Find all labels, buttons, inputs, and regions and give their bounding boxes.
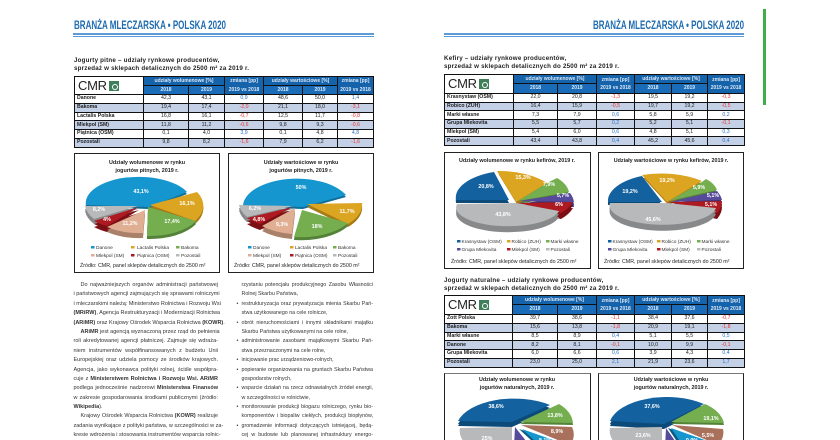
table: drinking yogurts: 9,3: [316, 122, 324, 128]
pie chart: 9,3%: [276, 222, 288, 228]
table: kefirs: 0,2: [612, 120, 619, 126]
pie chart: 18%: [312, 224, 323, 230]
table: drinking yogurts: 12,5: [278, 113, 288, 119]
text block: left body column: Do najważniejszych organów administracji państwowej: [80, 282, 218, 288]
table: natural yogurts: Zott Polska: [447, 315, 475, 321]
table: kefirs: Pozostali: [447, 138, 470, 144]
table: drinking yogurts: -0,8: [351, 113, 360, 119]
table: drinking yogurts: 19,4: [161, 104, 171, 110]
table: kefirs: [444, 74, 745, 146]
pie chart: 43,8%: [495, 212, 511, 218]
table: natural yogurts: 4,3: [686, 350, 693, 356]
text block: right body column: popieranie organizowania na gruntach Skarbu Państwa: [242, 367, 373, 373]
table: natural yogurts: zmiana [pp]: [602, 298, 629, 304]
source note: Źródło: CMR, panel sklepów detalicznych do 2500 m²: [451, 258, 577, 265]
pie chart: 6%: [555, 202, 563, 208]
legend: Pozostali: [702, 247, 721, 253]
table: drinking yogurts: -1,6: [351, 139, 360, 145]
table: natural yogurts: 23,0: [530, 359, 540, 365]
legend: Piątnica (OSM): [137, 253, 170, 259]
text block: right body column: w szczególności w rolnictwie,: [242, 395, 310, 401]
table: drinking yogurts: Lactalis Polska: [77, 113, 114, 119]
legend: Krasnystaw (OSM): [612, 239, 653, 245]
pie chart: [456, 171, 574, 232]
text block: left body column: i państwowych agencji zajmujących się sprawami rolniczymi: [74, 291, 220, 297]
table: natural yogurts: 38,4: [648, 315, 658, 321]
table: kefirs: 0,6: [612, 112, 619, 118]
pie chart: 50%: [296, 185, 307, 191]
table: drinking yogurts: 4,0: [203, 130, 210, 136]
pie chart: 8,2%: [93, 207, 105, 213]
table title: drinking yogurts: [74, 57, 249, 72]
table: natural yogurts: 15,6: [530, 324, 540, 330]
text block: left body column: (MRiRW), Agencja Restrukturyzacji i Modernizacji Rolnictwa: [74, 310, 220, 316]
table: drinking yogurts: 11,8: [161, 122, 171, 128]
text block: left body column: kresie wdrożenia i stosowania instrumentów wsparcia rolnic-: [74, 432, 221, 438]
table: drinking yogurts: 4,8: [352, 130, 359, 136]
table: natural yogurts: Bakoma: [447, 324, 467, 330]
chart subtitle: jogurtów naturalnych, 2019 r.: [479, 385, 555, 391]
table: drinking yogurts: Pozostali: [77, 139, 100, 145]
table: drinking yogurts: 16,8: [161, 113, 171, 119]
pie chart: 5,1%: [707, 193, 719, 199]
table: kefirs: 5,9: [686, 112, 693, 118]
table: kefirs: 0,6: [612, 129, 619, 135]
text block: right body column: [236, 282, 373, 438]
legend: Robico (ZUH): [662, 239, 691, 245]
pie chart: 37,6%: [644, 404, 660, 410]
table: kefirs: -0,5: [611, 103, 620, 109]
table: kefirs: 19,2: [684, 94, 695, 100]
legend: [608, 239, 730, 253]
panel: volume shares natural yogurts pie: [444, 373, 591, 440]
table: kefirs: -1,3: [611, 94, 620, 100]
table: natural yogurts: 38,6: [572, 315, 582, 321]
table title: natural yogurts: sprzedaż w sklepach detalicznych do 2500 m² za 2019 r.: [444, 285, 619, 292]
legend: [91, 245, 200, 259]
table: kefirs: 2019 vs 2018: [600, 85, 631, 91]
table: natural yogurts: 2018: [529, 306, 541, 312]
text block: right body column: administrowanie zasobami majątkowymi Skarbu Pań-: [242, 338, 373, 344]
table: natural yogurts: 2,1: [612, 359, 619, 365]
table: drinking yogurts: 2019: [201, 86, 212, 92]
legend: Mlekpol (SM): [253, 253, 282, 259]
table: drinking yogurts: 2019 vs 2018: [229, 86, 259, 92]
table: kefirs: udziały wartościowe [%]: [642, 76, 700, 82]
table title: natural yogurts: Jogurty naturalne – udziały rynkowe producentów,: [444, 277, 604, 284]
table: natural yogurts: 8,1: [573, 342, 581, 348]
panel: value shares natural yogurts pie: [598, 373, 744, 440]
table: natural yogurts: 0,6: [612, 350, 619, 356]
table: kefirs: -0,3: [722, 94, 730, 100]
table: kefirs: 15,9: [572, 103, 582, 109]
table title: drinking yogurts: Jogurty pitne – udziały rynkowe producentów,: [74, 57, 220, 64]
table: kefirs: Robico (ZUH): [447, 103, 480, 109]
table: kefirs: Krasnystaw (OSM): [447, 94, 493, 100]
text block: left body column: zadania wynikające z polityki państwa, w szczególności w za-: [74, 423, 223, 429]
table: natural yogurts: 37,6: [684, 315, 695, 321]
table: natural yogurts: 2019 vs 2018: [711, 306, 741, 312]
pie chart: 5,9%: [693, 185, 705, 191]
legend: Grupa Mlekovita: [612, 247, 648, 253]
text block: right body column: rzystaniu potencjału produkcyjnego Zasobu Własności: [242, 282, 373, 288]
legend: [457, 239, 579, 253]
table: natural yogurts: 5,1: [649, 333, 657, 339]
green vertical page marker: [763, 9, 766, 105]
table: natural yogurts: CMR: [448, 297, 477, 312]
legend: [248, 245, 357, 259]
table: natural yogurts: zmiana [pp]: [712, 298, 740, 304]
table: drinking yogurts: 0,1: [279, 130, 287, 136]
text block: right body column: cej w budowie lub planowanej infrastruktury energo-: [242, 432, 373, 438]
legend: Mlekpol (SM): [96, 253, 125, 259]
text block: left body column: Wikipedia).: [74, 404, 102, 410]
table: drinking yogurts: 50,0: [315, 95, 325, 101]
legend: Pozostali: [550, 247, 570, 253]
table: kefirs: -0,1: [722, 120, 730, 126]
table: drinking yogurts: -0,6: [351, 122, 360, 128]
table: natural yogurts: 6,6: [573, 350, 581, 356]
table title: kefirs: Kefiry – udziały rynkowe producentów,: [444, 55, 566, 62]
table: kefirs: 19,7: [648, 103, 658, 109]
table: natural yogurts: 0,4: [722, 350, 730, 356]
text block: right body column: restrukturyzacja oraz prywatyzacja mienia Skarbu Pań-: [242, 301, 373, 307]
table: natural yogurts: 10,0: [648, 342, 658, 348]
text block: left body column: podlega jednocześnie nadzorowi Ministerstwa Finansów: [74, 385, 218, 391]
chart title: Udziały wartościowe w rynku: [634, 377, 708, 383]
pie chart: 15,3%: [515, 175, 531, 181]
legend: Marki własne: [702, 239, 730, 245]
table: drinking yogurts: 8,2: [203, 139, 210, 145]
table: kefirs: 22,0: [530, 94, 541, 100]
table: natural yogurts: udziały wartościowe [%]: [642, 296, 700, 302]
table: drinking yogurts: Danone: [77, 95, 96, 101]
table: kefirs: 2019: [571, 85, 583, 91]
table: kefirs: 45,6: [684, 138, 695, 144]
pie chart: 6,2%: [249, 206, 261, 212]
legend: Bakoma: [338, 245, 356, 251]
pie chart: [608, 174, 722, 231]
table: kefirs: 2018: [647, 85, 659, 91]
table: kefirs: 5,2: [649, 120, 657, 126]
table: natural yogurts: 8,5: [531, 333, 539, 339]
table: kefirs: 6,0: [573, 129, 581, 135]
table: kefirs: 7,9: [573, 112, 581, 118]
table: drinking yogurts: 16,1: [201, 113, 212, 119]
pie chart: 20,8%: [478, 184, 494, 190]
table: kefirs: zmiana [pp]: [712, 76, 740, 82]
table: drinking yogurts: udziały wolumenowe [%]: [155, 78, 213, 84]
pie chart: 7,9%: [543, 182, 555, 188]
table: drinking yogurts: -2,0: [240, 104, 248, 110]
chart subtitle: jogurtów pitnych, 2019 r.: [268, 168, 333, 174]
table: kefirs: 0,4: [612, 138, 619, 144]
legend: Marki własne: [550, 239, 579, 245]
text block: right body column: komponentów i biopaliw ciekłych, produkcji biopłynów,: [242, 413, 373, 419]
table: kefirs: 5,1: [686, 129, 693, 135]
table: drinking yogurts: udziały wartościowe [%]: [272, 78, 329, 84]
pie chart: 13,8%: [547, 413, 563, 419]
table: natural yogurts: -1,1: [611, 315, 620, 321]
pie chart: [458, 399, 574, 440]
chart title: Udziały wolumenowe w rynku: [109, 160, 185, 166]
table: drinking yogurts: 4,8: [316, 130, 324, 136]
pie chart: 19,2%: [659, 178, 675, 184]
table: natural yogurts: 25,0: [572, 359, 582, 365]
table: natural yogurts: 13,8: [572, 324, 582, 330]
text block: left body column: [74, 282, 225, 438]
table: kefirs: 7,3: [532, 112, 539, 118]
legend: Mlekpol (SM): [662, 247, 690, 253]
text block: right body column: gromadzenie informacji dotyczących istniejącej, będą-: [242, 423, 373, 429]
table: drinking yogurts: -0,6: [240, 122, 248, 128]
table: drinking yogurts: -0,7: [240, 113, 248, 119]
table: drinking yogurts: 17,4: [201, 104, 212, 110]
table: kefirs: 0,4: [722, 138, 730, 144]
table: natural yogurts: 9,9: [686, 342, 693, 348]
table: drinking yogurts: 11,2: [202, 122, 211, 128]
table: natural yogurts: 5,5: [686, 333, 693, 339]
table: natural yogurts: 2019: [684, 306, 695, 312]
pie chart: 38,6%: [488, 404, 504, 410]
pie chart: 11,7%: [340, 209, 355, 215]
table: kefirs: 5,4: [532, 129, 539, 135]
legend: Lactalis Polska: [295, 245, 327, 251]
chart title: Udziały wolumenowe w rynku: [479, 377, 555, 383]
legend: Piątnica (OSM): [295, 253, 328, 259]
table: drinking yogurts: 11,7: [315, 113, 325, 119]
table: natural yogurts: 8,9: [573, 333, 581, 339]
legend: Lactalis Polska: [137, 245, 169, 251]
table: kefirs: 5,5: [532, 120, 539, 126]
chart title: Udziały wartościowe w rynku: [264, 160, 338, 166]
table: natural yogurts: 21,9: [648, 359, 658, 365]
legend: Grupa Mlekovita: [462, 247, 497, 253]
table: drinking yogurts: 2018: [277, 86, 289, 92]
table: drinking yogurts: 2018: [160, 86, 172, 92]
table: kefirs: 4,8: [649, 129, 657, 135]
table: natural yogurts: Pozostali: [447, 359, 470, 365]
text block: right body column: gospodarstw rolnych,: [242, 376, 292, 382]
pie chart: 11,2%: [122, 221, 138, 227]
text block: right body column: monitorowanie produkcji biogazu rolniczego, rynku bio-: [242, 404, 373, 410]
pie chart: 16,1%: [179, 201, 195, 207]
legend: Krasnystaw (OSM): [462, 239, 502, 245]
pie chart: 8,9%: [551, 429, 563, 435]
pie chart: [239, 179, 362, 240]
text block: right body column: Skarbu Państwa użytkowanymi na cele rolne,: [242, 329, 348, 335]
legend: Danone: [96, 245, 113, 251]
table: drinking yogurts: 18,0: [315, 104, 325, 110]
table: drinking yogurts: 48,6: [278, 95, 288, 101]
pie chart: [85, 177, 203, 239]
text block: right body column: stwa przeznaczonymi na cele rolne,: [242, 348, 325, 354]
table: kefirs: 0,3: [722, 129, 730, 135]
table: kefirs: 2019 vs 2018: [711, 85, 741, 91]
pie chart: 5,5%: [702, 433, 714, 439]
table: kefirs: 43,4: [530, 138, 541, 144]
pie chart: 5,1%: [705, 202, 717, 208]
legend: Pozostali: [338, 253, 357, 259]
text block: left body column: Europejskiej oraz udziela pomocy ze środków krajowych.: [74, 357, 218, 363]
chart subtitle: jogurtów naturalnych, 2019 r.: [633, 385, 709, 391]
text block: left body column: (ARiMR) oraz Krajowy Ośrodek Wsparcia Rolnictwa (KOWR).: [74, 320, 225, 326]
panel: value shares drinking yogurts pie: [228, 153, 374, 273]
table: drinking yogurts: 3,9: [240, 130, 248, 136]
table: kefirs: zmiana [pp]: [602, 76, 629, 82]
table: kefirs: Mlekpol (SM): [447, 129, 479, 135]
table: drinking yogurts: Bakoma: [77, 104, 97, 110]
table title: kefirs: sprzedaż w sklepach detalicznych do 2500 m² za 2019 r.: [444, 63, 619, 70]
table: kefirs: CMR: [448, 76, 477, 91]
table: drinking yogurts: 6,2: [316, 139, 324, 145]
table: natural yogurts: 0,5: [722, 333, 730, 339]
table: drinking yogurts: zmiana [pp]: [342, 78, 369, 84]
table: natural yogurts: 20,9: [648, 324, 658, 330]
table: kefirs: 0,2: [722, 112, 730, 118]
table: drinking yogurts: 2019: [314, 86, 326, 92]
source note: Źródło: CMR, panel sklepów detalicznych do 2500 m²: [234, 262, 360, 269]
pie chart: 19,1%: [703, 416, 719, 422]
table: natural yogurts: 0,4: [612, 333, 619, 339]
pie chart: 17,4%: [164, 219, 180, 225]
table: kefirs: Grupa Mlekovita: [447, 120, 487, 126]
legend: Mlekpol (SM): [512, 247, 540, 253]
table: kefirs: -0,5: [722, 103, 730, 109]
text block: right body column: wsparcie działań na rzecz odnawialnych źródeł energii,: [242, 385, 373, 391]
legend: Robico (ZUH): [512, 239, 541, 245]
table title: kefirs: [444, 55, 619, 70]
panel: value shares kefir pie: [598, 152, 744, 269]
table: natural yogurts: 1,7: [722, 359, 730, 365]
table: drinking yogurts: -1,6: [240, 139, 248, 145]
text block: right body column: Rolnej Skarbu Państwa,: [242, 291, 298, 297]
pie chart: 43,1%: [133, 189, 149, 195]
text block: right body column: inicjowanie prac urządzeniowo-rolnych,: [242, 357, 334, 363]
table: natural yogurts: udziały wolumenowe [%]: [525, 296, 584, 302]
table: natural yogurts: -0,1: [722, 342, 730, 348]
table: kefirs: udziały wolumenowe [%]: [526, 76, 584, 82]
text block: left body column: cuje z Ministerstwem Rolnictwa i Rozwoju Wsi. ARiMR: [74, 376, 218, 382]
text block: left body column: ARiMR jest agencją wyznaczoną przez rząd do pełnienia: [80, 329, 220, 335]
table: drinking yogurts: 43,1: [201, 95, 212, 101]
legend: Bakoma: [181, 245, 199, 251]
table: drinking yogurts: 9,8: [279, 122, 287, 128]
table: natural yogurts: 2019 vs 2018: [600, 306, 631, 312]
chart title: Udziały wolumenowe w rynku kefirów, 2019 r.: [459, 158, 576, 164]
table: drinking yogurts: 7,9: [279, 139, 287, 145]
table: kefirs: 2018: [530, 85, 541, 91]
text block: left body column: roli akredytowanej agencji płatniczej. Zajmuje się wdraża-: [74, 338, 218, 344]
table: natural yogurts: 2018: [647, 306, 659, 312]
text block: left body column: i mleczarskimi należą: Ministerstwo Rolnictwa i Rozwoju Wsi: [74, 301, 221, 307]
table: natural yogurts: -1,8: [611, 324, 620, 330]
pie chart: 5,7%: [557, 193, 569, 199]
table: kefirs: 16,4: [530, 103, 541, 109]
pie chart: 4,8%: [253, 217, 265, 223]
table: kefirs: 19,2: [684, 103, 695, 109]
table: drinking yogurts: [74, 76, 374, 148]
table: natural yogurts: 23,6: [684, 359, 695, 365]
table: drinking yogurts: -3,1: [351, 104, 360, 110]
panel: volume shares drinking yogurts pie: [74, 153, 220, 273]
table title: natural yogurts: [444, 277, 619, 292]
text block: right body column: stwa użytkowanego na cele rolnicze,: [242, 310, 327, 316]
table: kefirs: 45,2: [648, 138, 658, 144]
text block: left body column: w zakresie gospodarowania środkami publicznymi (źródło:: [74, 395, 218, 401]
source note: Źródło: CMR, panel sklepów detalicznych do 2500 m²: [80, 262, 206, 269]
table: kefirs: 5,1: [686, 120, 693, 126]
pie chart: 19,2%: [622, 189, 638, 195]
table: drinking yogurts: 0,1: [162, 130, 170, 136]
table: drinking yogurts: 1,4: [352, 95, 359, 101]
table: natural yogurts: -0,7: [722, 315, 730, 321]
table: drinking yogurts: 21,1: [278, 104, 288, 110]
table: natural yogurts: Grupa Mlekovita: [447, 350, 487, 356]
table: kefirs: 2019: [684, 85, 695, 91]
text block: right body column: obrót nieruchomościami i innymi składnikami majątku: [242, 320, 373, 326]
table: natural yogurts: 39,7: [530, 315, 540, 321]
table: natural yogurts: 8,2: [531, 342, 539, 348]
table: drinking yogurts: 0,9: [240, 95, 248, 101]
table: natural yogurts: Marki własne: [447, 333, 479, 339]
table: drinking yogurts: CMR: [78, 78, 107, 92]
legend: Danone: [253, 245, 270, 251]
table: kefirs: 5,7: [573, 120, 581, 126]
chart subtitle: jogurtów pitnych, 2019 r.: [114, 168, 179, 174]
table: kefirs: 19,5: [648, 94, 658, 100]
pie chart: [610, 397, 724, 440]
table: natural yogurts: Danone: [447, 342, 466, 348]
source note: Źródło: CMR, panel sklepów detalicznych do 2500 m²: [604, 258, 730, 265]
pie chart: 4%: [103, 217, 111, 223]
pie chart: 23,6%: [635, 433, 651, 439]
table: kefirs: Marki własne: [447, 112, 479, 118]
table: natural yogurts: 6,0: [531, 350, 539, 356]
text block: left body column: Agencja, jako wykonawca polityki rolnej, ściśle współpra-: [74, 367, 218, 373]
table: natural yogurts: [444, 295, 745, 368]
table: drinking yogurts: 2019 vs 2018: [340, 86, 371, 92]
table: kefirs: 43,8: [572, 138, 582, 144]
table: kefirs: 5,8: [649, 112, 657, 118]
table: drinking yogurts: 42,3: [161, 95, 171, 101]
chart title: Udziały wartościowe w rynku kefirów, 2019 r.: [614, 158, 729, 164]
legend: Pozostali: [181, 253, 200, 259]
table title: drinking yogurts: sprzedaż w sklepach detalicznych do 2500 m² za 2019 r.: [74, 65, 249, 72]
table: drinking yogurts: Piątnica (OSM): [77, 130, 114, 136]
table: drinking yogurts: Mlekpol (SM): [77, 122, 109, 128]
text block: left body column: niem instrumentów współfinansowanych z budżetu Unii: [74, 348, 218, 354]
table: natural yogurts: 3,9: [649, 350, 657, 356]
table: natural yogurts: 19,1: [684, 324, 695, 330]
table: drinking yogurts: 9,8: [162, 139, 170, 145]
table: natural yogurts: -1,8: [722, 324, 730, 330]
text block: left body column: Krajowy Ośrodek Wsparcia Rolnictwa (KOWR) realizuje: [80, 413, 218, 419]
table: drinking yogurts: zmiana [pp]: [230, 78, 258, 84]
table: kefirs: 20,8: [572, 94, 582, 100]
table: natural yogurts: 2019: [571, 306, 583, 312]
table: natural yogurts: -0,1: [611, 342, 620, 348]
panel: volume shares kefir pie: [444, 152, 591, 269]
pie chart: 45,6%: [645, 217, 661, 223]
